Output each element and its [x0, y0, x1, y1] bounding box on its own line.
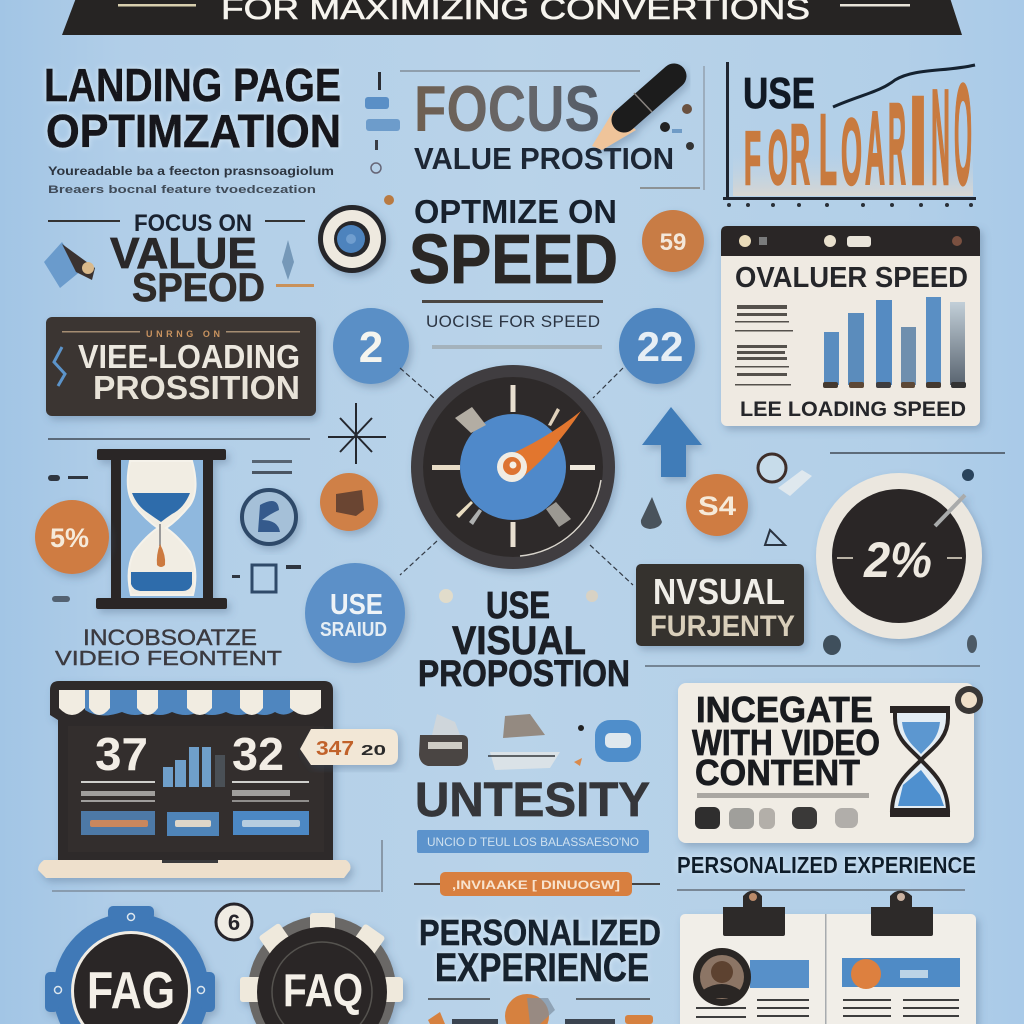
card: integrate with video content [678, 683, 983, 843]
small doodle icons [439, 454, 977, 655]
icon: mid cluster [419, 714, 641, 770]
icon: target [318, 205, 386, 273]
chart: use for loading: O [768, 116, 788, 201]
chart: use for loading: A [865, 91, 885, 207]
heading: personalized experience small: PERSONALIZED EXPERIENCE [677, 852, 976, 878]
badge: S4: S4 [698, 491, 736, 521]
heading: landing page optimization: LANDING PAGE [44, 59, 341, 111]
dashed divider above hourglass [48, 438, 310, 440]
panel: visual urgency label: FURJENTY [650, 610, 795, 643]
icon: dark ring [242, 490, 296, 544]
title banner [62, 0, 962, 35]
badge: orange 5 percent: 5% [50, 523, 89, 553]
panel: focus value proposition: FOCUS [414, 72, 600, 145]
chart: use for loading: USE [743, 69, 815, 118]
blue label bar: UNCIO D TEUL LOS BALASSAESO'NO [427, 835, 639, 849]
icon: avatar [693, 948, 751, 1006]
awning [59, 690, 321, 716]
legend lines [735, 305, 793, 386]
heading: landing page optimization [44, 59, 341, 157]
chart: use for loading: I [908, 70, 928, 211]
chart: use for loading: R [790, 108, 810, 203]
heading: optimize on speed: SPEED [409, 220, 618, 298]
heading: optimize on speed: OPTMIZE ON [414, 193, 617, 230]
bars [823, 297, 966, 388]
chart: use for loading: F [744, 116, 761, 200]
panel: laptop dashboard: 32 [232, 728, 284, 780]
panel: value loading proposition: UNRNG ON [146, 329, 220, 339]
gauge [411, 365, 615, 569]
panel: resumes [680, 890, 976, 1024]
panel: focus value proposition [400, 66, 705, 190]
panel: browser bar chart: OVALUER SPEED [735, 262, 968, 294]
callout tag: 20 [361, 742, 386, 759]
heading: optimize on speed [409, 193, 618, 349]
heading: urgency [414, 774, 660, 896]
dashes under heading [677, 889, 965, 891]
text: incorporate video content [55, 625, 282, 670]
panel: value loading proposition: VIEE-LOADING [78, 338, 300, 375]
intro text block: Breaers bocnal feature tvoedcezation [48, 184, 316, 196]
badge: blue use: SRAIUD [320, 619, 387, 641]
heading: optimize on speed: UOCISE FOR SPEED [426, 312, 600, 331]
card buttons [695, 807, 858, 829]
heading: focus on value speed [48, 210, 305, 310]
panel: value loading proposition: PROSSITION [93, 369, 300, 406]
small doodles around hourglass [48, 460, 301, 602]
badge: orange circle: 59 [660, 229, 686, 256]
badge: blue number 2 right [619, 308, 695, 384]
intro text block: Youreadable ba a feecton prasnsoagiolum [48, 164, 334, 178]
panel: visual urgency label: NVSUAL [653, 571, 785, 612]
badge: FAQ blue: FAG [87, 962, 175, 1020]
badge: orange circle [642, 210, 704, 272]
text: incorporate video content: INCOBSOATZE [83, 625, 257, 650]
icon: hourglass left [96, 449, 227, 609]
badge: FAQ blue [45, 906, 215, 1024]
badge: blue number 2 left: 2 [359, 323, 383, 372]
heading: personalized experience large [419, 912, 661, 990]
badge: S4 [686, 474, 748, 536]
dashboard buttons [81, 811, 309, 836]
panel: focus value proposition: VALUE PROSTION [414, 141, 674, 176]
clips [723, 890, 933, 936]
divider text under laptop [52, 840, 383, 892]
card: integrate with video content: CONTENT [695, 752, 860, 793]
panel: value loading proposition [46, 317, 316, 416]
heading: urgency: UNTESITY [415, 774, 650, 827]
dashed line above 2 percent gauge [830, 452, 1005, 454]
icon: up arrow [642, 407, 702, 477]
panel: browser bar chart: LEE LOADING SPEED [740, 398, 966, 421]
card: integrate with video content: INCEGATE [696, 689, 873, 730]
chart: use for loading: L [819, 94, 837, 206]
panel: visual urgency label [636, 564, 804, 646]
heading: focus on value speed: SPEOD [132, 266, 265, 310]
badge: number 6: 6 [228, 910, 240, 935]
callout tag [300, 729, 398, 765]
text lines [696, 999, 959, 1018]
heading: focus on value speed: FOCUS ON [134, 210, 252, 237]
gauge badge: 2 percent [816, 473, 982, 639]
badge: number 6 [216, 904, 252, 940]
card: integrate with video content: WITH VIDEO [692, 722, 880, 763]
callout tag: 347 [316, 738, 354, 760]
connector lines [400, 368, 633, 585]
gauge badge: 2 percent: 2% [863, 532, 932, 588]
badge: orange 5 percent [35, 500, 109, 574]
decorative icons: top left column [365, 72, 400, 205]
panel: laptop dashboard: 37 [95, 728, 148, 780]
icon: figures beside value heading [44, 240, 314, 288]
badge: FAQ dark [240, 913, 403, 1024]
icon: small dots right of pen [660, 104, 694, 150]
blue bars [750, 958, 960, 989]
icon: card hourglass [890, 706, 950, 817]
chart: use for loading: R [888, 79, 906, 209]
blue label bar [417, 830, 649, 853]
badge: blue use [305, 563, 405, 663]
chart: use for loading: O [841, 99, 862, 204]
intro text block [48, 164, 334, 196]
icon: star burst [328, 403, 386, 464]
heading: use visual proposition [418, 585, 630, 694]
orange label bar: ,INVIAAKE [ DINUOGW] [452, 878, 620, 892]
heading: use visual proposition: VISUAL [452, 619, 586, 663]
divider above card [645, 665, 980, 667]
panel: browser bar chart [721, 226, 980, 426]
panel: laptop dashboard [38, 681, 398, 878]
badge: blue use: USE [330, 589, 383, 621]
mini bars [163, 747, 225, 787]
text: incorporate video content: VIDEIO FEONTENT [55, 648, 282, 670]
badge: FAQ dark: FAQ [283, 964, 363, 1016]
badge: orange icon [320, 473, 378, 531]
orange label bar [414, 872, 660, 896]
heading: focus on value speed: VALUE [110, 229, 257, 278]
icon: ring [955, 686, 983, 714]
badge: blue number 2 left [333, 308, 409, 384]
heading: personalized experience large: EXPERIENCE [435, 946, 649, 990]
badge: blue number 2 right: 22 [637, 323, 683, 370]
heading: personalized experience large: PERSONALIZED [419, 912, 661, 953]
footer fragment [428, 994, 653, 1024]
heading: landing page optimization: OPTIMZATION [46, 105, 341, 157]
heading: use visual proposition: PROPOSTION [418, 653, 630, 694]
icon: marker pen [592, 76, 674, 150]
heading: use visual proposition: USE [486, 585, 550, 627]
chart: use for loading [723, 54, 976, 215]
